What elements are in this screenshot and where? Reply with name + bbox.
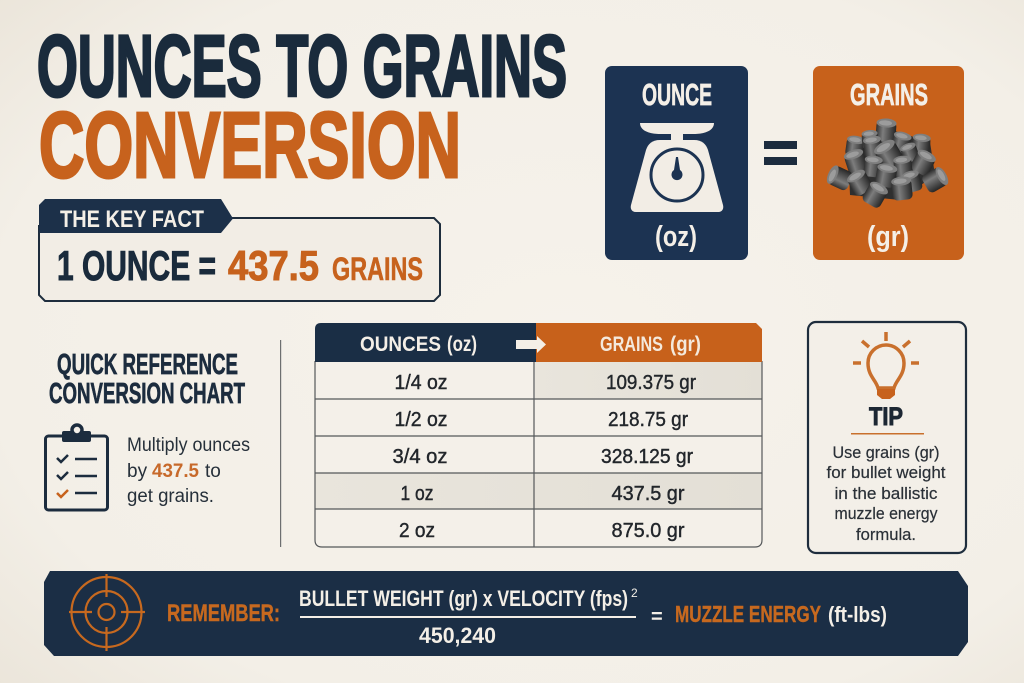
key fact value: 437.5 bbox=[228, 242, 319, 289]
table values: 437.5 gr bbox=[612, 483, 685, 505]
formula fraction: BULLET WEIGHT (gr) x VELOCITY (fps) bbox=[299, 586, 628, 611]
text: multiply tip bbox=[127, 435, 250, 507]
heading: quick reference: CONVERSION CHART bbox=[49, 378, 245, 410]
table header: ounces: (oz) bbox=[447, 333, 477, 356]
table header: grains: (gr) bbox=[670, 333, 701, 356]
table header: ounces bbox=[315, 323, 536, 362]
panel: grains: GRAINS bbox=[850, 77, 928, 112]
table header: grains: GRAINS bbox=[600, 333, 663, 356]
panel: ounce: (oz) bbox=[655, 221, 697, 253]
key fact value bbox=[57, 242, 423, 289]
table values: 875.0 gr bbox=[612, 520, 685, 542]
tip text: in the ballistic bbox=[834, 484, 938, 503]
icon: header arrow bbox=[516, 336, 546, 353]
title: CONVERSION bbox=[39, 93, 461, 197]
table values: 3/4 oz bbox=[392, 446, 448, 468]
key fact value: GRAINS bbox=[332, 251, 423, 287]
icon: clipboard bbox=[46, 425, 108, 510]
icon: light bulb bbox=[853, 332, 919, 399]
tip text: muzzle energy bbox=[834, 504, 938, 523]
formula label: REMEMBER: bbox=[167, 600, 280, 627]
tip text: for bullet weight bbox=[826, 463, 946, 482]
formula result: (ft-lbs) bbox=[828, 602, 887, 627]
heading: quick reference: QUICK REFERENCE bbox=[57, 349, 238, 381]
formula fraction: 2 bbox=[631, 586, 638, 600]
text: multiply tip: Multiply ounces bbox=[127, 435, 250, 456]
table header: grains bbox=[536, 323, 762, 362]
text: multiply tip: get grains. bbox=[127, 486, 214, 507]
panel: grains bbox=[813, 66, 964, 260]
formula result: MUZZLE ENERGY bbox=[675, 601, 821, 627]
formula fraction bbox=[299, 586, 638, 648]
icon: kitchen scale bbox=[631, 123, 723, 212]
icon: pile of grains bbox=[824, 118, 951, 210]
text: multiply tip: 437.5 bbox=[152, 461, 199, 482]
tip text: Use grains (gr) bbox=[832, 443, 940, 462]
panel: ounce bbox=[605, 66, 748, 260]
formula result: = bbox=[651, 606, 663, 628]
table values: 109.375 gr bbox=[606, 372, 696, 394]
conversion table bbox=[315, 323, 762, 547]
title bbox=[37, 18, 567, 197]
title: OUNCES TO GRAINS bbox=[37, 18, 567, 115]
table header: ounces: OUNCES bbox=[360, 333, 441, 356]
panel: tip bbox=[808, 322, 966, 553]
text: multiply tip: to bbox=[205, 461, 221, 482]
text: multiply tip: by bbox=[127, 461, 148, 482]
table values: 218.75 gr bbox=[608, 409, 688, 431]
panel: key fact bbox=[39, 199, 440, 301]
table values: 1/2 oz bbox=[394, 409, 448, 431]
table values: 1/4 oz bbox=[394, 372, 448, 394]
table values: 2 oz bbox=[399, 520, 435, 542]
icon: target bbox=[69, 574, 145, 651]
formula fraction: 450,240 bbox=[419, 623, 496, 648]
key fact value: 1 OUNCE = bbox=[57, 242, 216, 289]
key fact tab label: THE KEY FACT bbox=[60, 206, 204, 233]
table values: 1 oz bbox=[400, 483, 434, 505]
icon: equals sign bbox=[764, 141, 797, 165]
panel: ounce: OUNCE bbox=[642, 77, 712, 112]
tip heading: TIP bbox=[869, 403, 903, 431]
table values: 328.125 gr bbox=[601, 446, 693, 468]
key fact tab bbox=[39, 199, 233, 233]
banner: formula bbox=[44, 571, 968, 656]
table values bbox=[392, 372, 696, 542]
tip text: formula. bbox=[856, 525, 916, 544]
tip text bbox=[826, 443, 946, 544]
heading: quick reference bbox=[49, 349, 245, 410]
panel: grains: (gr) bbox=[867, 221, 909, 253]
